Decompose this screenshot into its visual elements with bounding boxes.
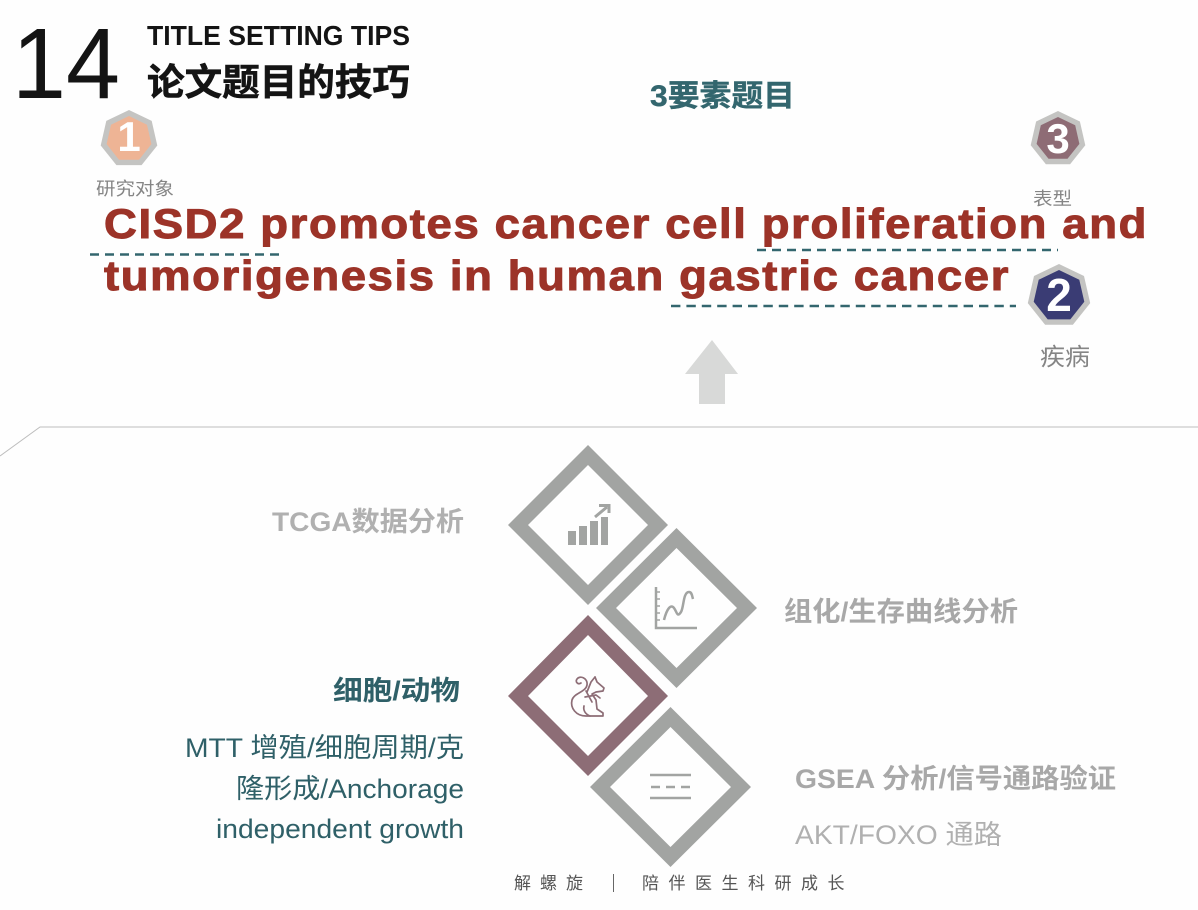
- badge 1: [101, 110, 157, 165]
- diamond 1: TCGA: [508, 445, 668, 605]
- diamond 2: survival curve: [596, 528, 757, 688]
- heading: english: TITLE SETTING TIPS: [147, 20, 410, 51]
- icon: squirrel: [572, 677, 604, 716]
- icon: curve chart: [656, 587, 697, 628]
- badge 1: 1: [117, 113, 141, 160]
- badge 2: [1028, 264, 1090, 325]
- badge 3: [1031, 111, 1085, 164]
- text block: cell assays: [185, 733, 464, 844]
- label: GSEA: GSEA 分析/信号通路验证: [795, 764, 1116, 794]
- label: research object: 研究对象: [96, 179, 174, 199]
- paper title line 1: CISD2 promotes cancer cell proliferation and: [104, 200, 1148, 247]
- section number: 14: [12, 8, 120, 120]
- dashed underline: disease: [671, 305, 1016, 307]
- label: AKT pathway: AKT/FOXO 通路: [795, 820, 1002, 850]
- label: cell and animal: 细胞/动物: [333, 676, 460, 706]
- footer: 解螺旋: [514, 874, 592, 893]
- heading: chinese: 论文题目的技巧: [147, 62, 410, 103]
- dashed underline: research object: [90, 253, 281, 256]
- diamond 3: cell and animal: [508, 615, 668, 776]
- icon: lines: [650, 775, 691, 798]
- label: TCGA: TCGA数据分析: [272, 507, 464, 537]
- text block: cell assays: 隆形成/Anchorage: [236, 774, 464, 804]
- arrow: up: [685, 340, 738, 404]
- label: histology and survival: 组化/生存曲线分析: [784, 597, 1018, 627]
- text block: cell assays: independent growth: [216, 814, 464, 844]
- diamond 4: GSEA: [590, 707, 751, 867]
- label: phenotype: 表型: [1033, 189, 1072, 209]
- label: disease: 疾病: [1040, 344, 1090, 371]
- footer: [514, 874, 854, 893]
- subtitle: 3要素题目: [650, 80, 795, 113]
- paper title line 2: tumorigenesis in human gastric cancer: [104, 252, 1010, 299]
- icon: rising bars: [568, 506, 609, 545]
- badge 3: 3: [1046, 115, 1070, 162]
- footer: 陪伴医生科研成长: [642, 874, 854, 893]
- divider line: [0, 427, 1198, 456]
- badge 2: 2: [1046, 269, 1072, 321]
- text block: cell assays: MTT 增殖/细胞周期/克: [185, 733, 464, 763]
- dashed underline: phenotype: [757, 249, 1058, 251]
